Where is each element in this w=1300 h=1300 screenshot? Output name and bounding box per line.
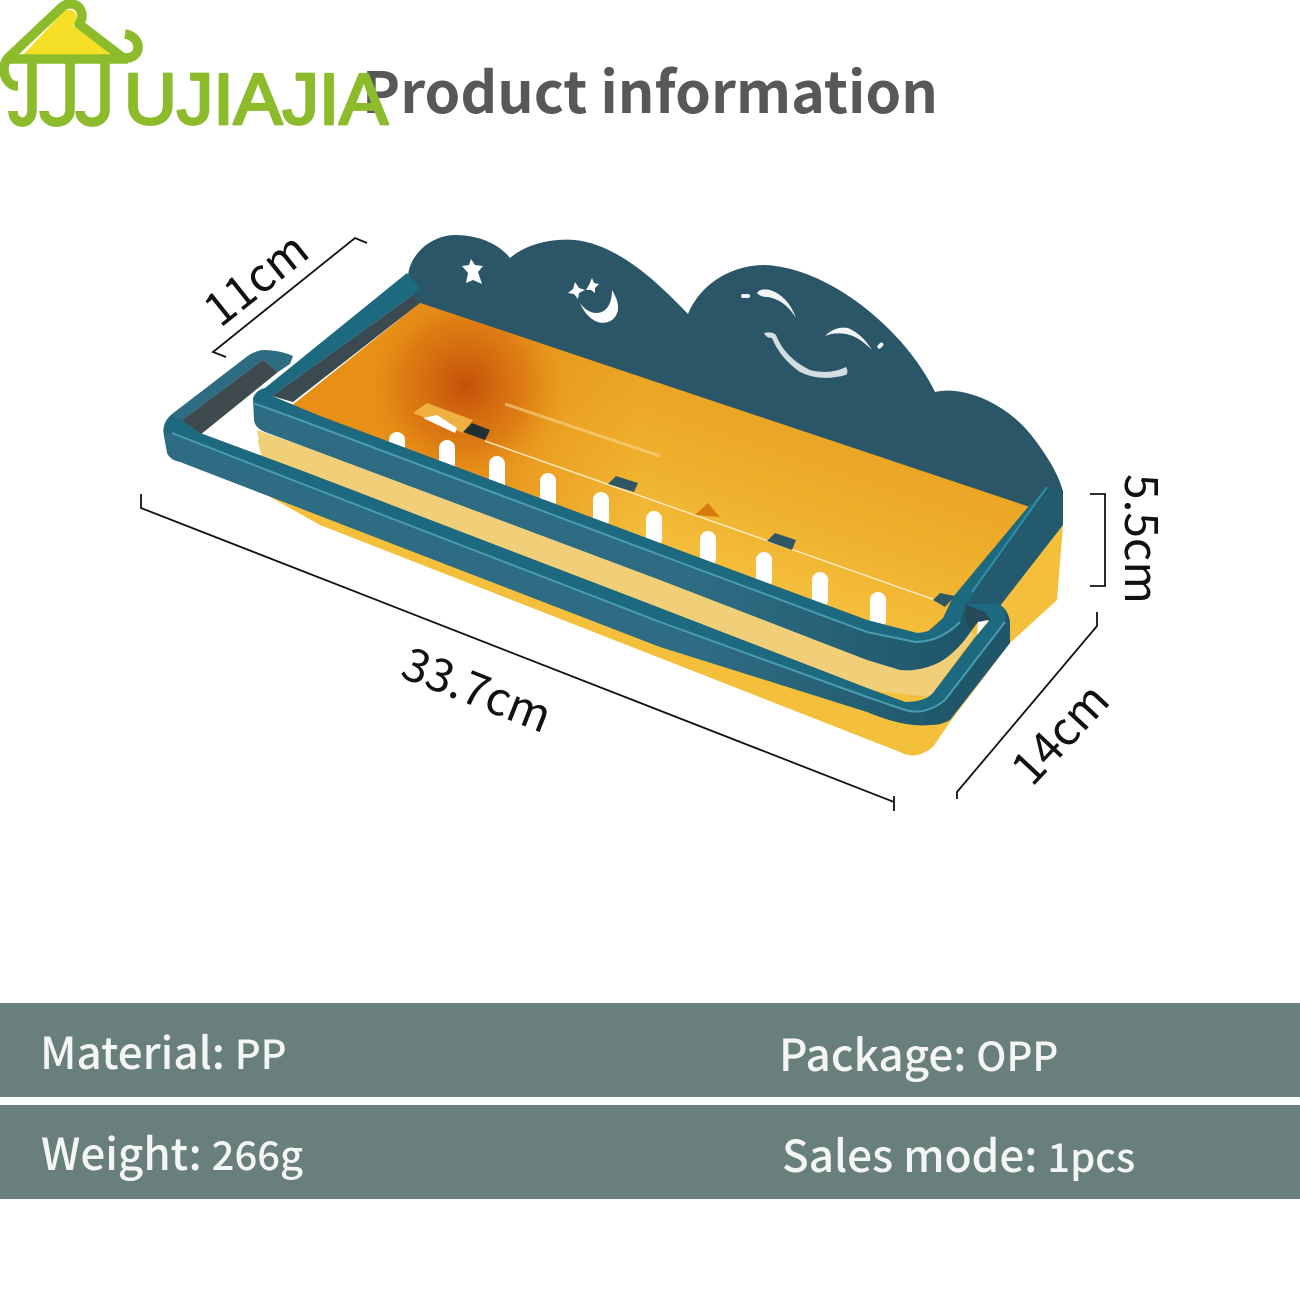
dimension: 5.5cm: 5.5cm bbox=[1111, 474, 1177, 604]
dimension: 33.7cm bbox=[141, 494, 894, 811]
back plate cloud with cut-outs bbox=[408, 235, 1063, 515]
pale yellow band bbox=[257, 430, 975, 697]
bar end gap bbox=[977, 620, 989, 635]
floor slit bbox=[413, 403, 935, 600]
rim: right arm top bbox=[925, 487, 1047, 634]
rim top face bbox=[253, 388, 967, 642]
material spec: Material: PP bbox=[40, 1018, 287, 1082]
dimension: 33.7cm: 33.7cm bbox=[394, 628, 562, 747]
rim: back-left arm bbox=[253, 273, 420, 398]
package spec: Package: OPP bbox=[779, 1020, 1058, 1084]
rim inner lip bbox=[272, 295, 420, 402]
dimension: 14cm: 14cm bbox=[994, 667, 1122, 797]
bar end inner lip bbox=[965, 605, 990, 631]
logo wordmark: UJIAJIA bbox=[124, 60, 388, 140]
bar top face bbox=[164, 416, 1006, 712]
logo: JUJIAJIA hanger bbox=[4, 4, 388, 140]
icon: hanger with hooks bbox=[4, 4, 138, 122]
basket lower body bbox=[258, 440, 1063, 756]
dimension: 11cm: 11cm bbox=[188, 215, 321, 339]
bar inner lip bbox=[182, 360, 278, 435]
icon: moon and stars cut-out bbox=[568, 278, 618, 323]
sales mode spec: Sales mode: 1pcs bbox=[782, 1121, 1135, 1185]
drain slots bbox=[389, 432, 886, 628]
spec row: weight and sales mode bbox=[0, 1105, 1300, 1199]
rim front band bbox=[253, 388, 975, 670]
towel bar bbox=[163, 350, 1010, 725]
dimension: 11cm bbox=[188, 215, 367, 357]
basket interior bbox=[280, 303, 1030, 645]
icon: swoosh stars cut-out bbox=[741, 289, 884, 378]
title: Product information bbox=[362, 48, 938, 130]
wall highlight bbox=[505, 404, 660, 456]
product: wall shelf basket bbox=[163, 235, 1063, 756]
weight spec: Weight: 266g bbox=[41, 1119, 303, 1183]
icon: star cut-out bbox=[462, 259, 483, 284]
rim: right arm side bbox=[965, 487, 1063, 606]
dimension: 14cm bbox=[957, 612, 1122, 799]
icon: roof bbox=[23, 10, 112, 55]
spec row: material and package bbox=[0, 1003, 1300, 1097]
mounting tabs bbox=[463, 423, 955, 607]
